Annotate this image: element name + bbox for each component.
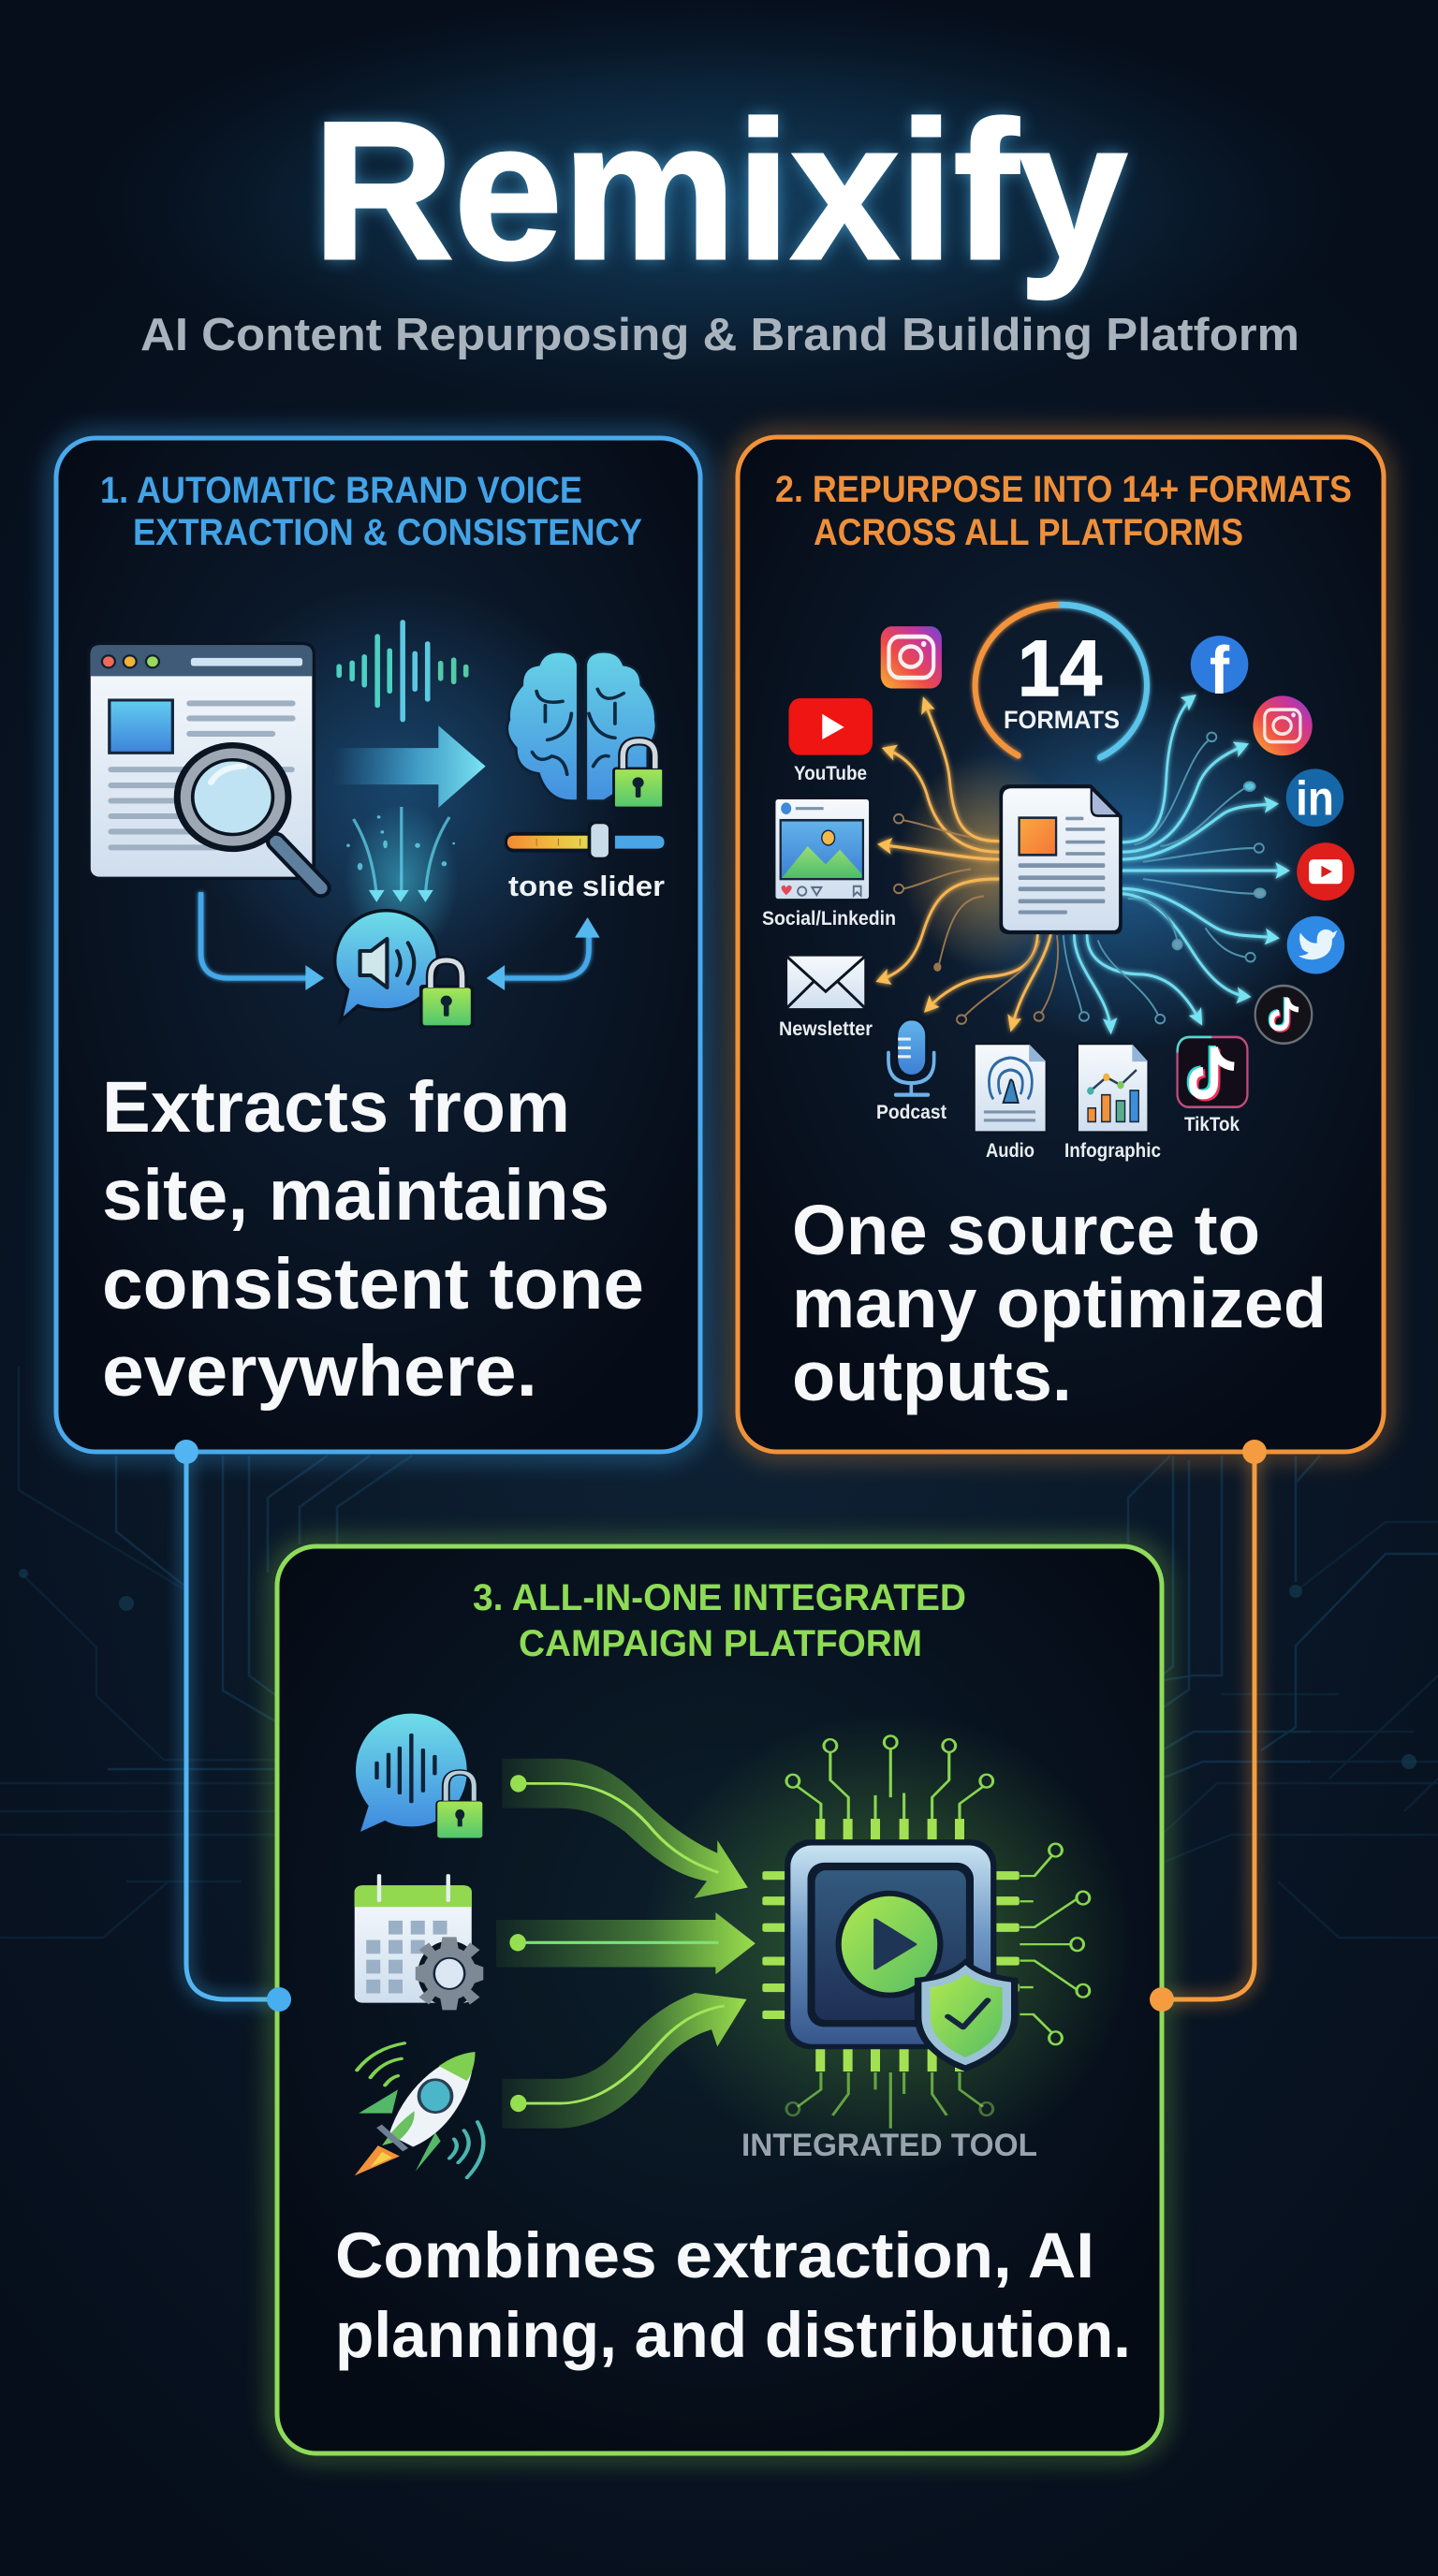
- panel 1 body text: everywhere.: [102, 1331, 537, 1412]
- integrated tool label: INTEGRATED TOOL: [741, 2128, 1037, 2163]
- panel: repurpose formats: [738, 437, 1384, 1452]
- title: Remixify: [313, 80, 1127, 300]
- icon: chip traces: [786, 1735, 1090, 2129]
- icon: facebook: [1191, 634, 1248, 709]
- icon: chip with play button: [785, 1839, 996, 2049]
- icon: falling particles: [345, 803, 458, 957]
- FORMATS label: FORMATS: [1004, 706, 1120, 734]
- panel 3 body text: [335, 2219, 1131, 2371]
- icon: facebook: f: [1210, 634, 1229, 709]
- format rays: orange: [880, 701, 1050, 1027]
- icon: speech bubble with lock: [335, 911, 475, 1028]
- icon: linkedin: [1286, 768, 1343, 827]
- panel 1 heading: [100, 470, 642, 553]
- format rays: faded orange: [894, 814, 1058, 1024]
- arrow band: calendar to chip: [496, 1912, 756, 1974]
- subtitle: AI Content Repurposing & Brand Building Platform: [140, 310, 1299, 360]
- format labels: Audio: [986, 1140, 1034, 1162]
- panel 3 diagram: [355, 1711, 1134, 2178]
- icon: instagram square: [881, 626, 942, 689]
- connector: orange, panel 2 to panel 3: [1162, 1452, 1255, 1999]
- panel 2 heading: 2. REPURPOSE INTO 14+ FORMATS: [775, 469, 1352, 510]
- connector dot: blue bottom: [267, 1987, 291, 2012]
- panel 3 body text: planning, and distribution.: [335, 2299, 1131, 2371]
- icon: rocket: [355, 2043, 483, 2178]
- panel 1 body text: site, maintains: [102, 1155, 609, 1236]
- icon: tiktok circle: [1255, 986, 1312, 1044]
- connector dot: blue top: [174, 1440, 198, 1464]
- format labels: [762, 763, 1240, 1162]
- panel 1 body text: consistent tone: [102, 1244, 644, 1325]
- panel 1 diagram: [87, 583, 667, 1028]
- format rays: blue: [1074, 697, 1285, 1030]
- connector dot: orange bottom: [1150, 1987, 1174, 2012]
- format labels: Podcast: [876, 1102, 946, 1123]
- icon: youtube: [788, 698, 873, 755]
- icon: brain with lock: [507, 651, 664, 808]
- arrow band: voice to chip: [502, 1759, 748, 1898]
- panel 2 heading: ACROSS ALL PLATFORMS: [814, 512, 1243, 553]
- background circuit traces far: [0, 1367, 1438, 1938]
- icon: instagram circle: [1253, 695, 1313, 755]
- format labels: YouTube: [794, 763, 867, 784]
- 14 number: 14: [1018, 624, 1102, 712]
- panel 1 body text: [102, 1067, 644, 1412]
- icon: audio document: [975, 1044, 1047, 1132]
- icon: envelope: [786, 955, 866, 1010]
- icon: tone slider control: [505, 821, 667, 860]
- panel 1 body text: Extracts from: [102, 1067, 570, 1148]
- background circuit traces near panels: [108, 1456, 1438, 1778]
- connector dot: orange top: [1242, 1440, 1267, 1464]
- panel: integrated platform: [277, 1546, 1162, 2453]
- icon: social post card: [774, 798, 870, 900]
- icon: tiktok square: [1178, 1037, 1247, 1107]
- connector: blue, panel 1 to panel 3: [186, 1452, 279, 1999]
- 14 formats ring: [976, 605, 1147, 757]
- icon: source document: [999, 784, 1123, 934]
- panel 2 body text: outputs.: [792, 1337, 1072, 1415]
- panel: brand voice: [56, 438, 700, 1452]
- arrow: to brain: [334, 725, 486, 808]
- panel 2 body text: One source to: [792, 1191, 1260, 1269]
- icon: browser with magnifier: [87, 642, 321, 888]
- background circuit nodes: [19, 1569, 1416, 1769]
- panel 1 heading: EXTRACTION & CONSISTENCY: [133, 512, 642, 553]
- icon: microphone: [888, 1019, 934, 1095]
- arrow band: rocket to chip: [502, 1993, 747, 2129]
- panel 2 hub diagram: [774, 605, 1355, 1132]
- icon: sound wave: [339, 622, 466, 720]
- panel 3 heading: CAMPAIGN PLATFORM: [519, 1623, 922, 1664]
- title: Remixify: [313, 80, 1127, 300]
- format labels: Infographic: [1064, 1140, 1161, 1162]
- icon: youtube circle: [1297, 842, 1355, 900]
- icon: shield check: [915, 1958, 1019, 2071]
- panel 1 heading: 1. AUTOMATIC BRAND VOICE: [100, 470, 582, 511]
- arrow: slider to bubble: [487, 917, 600, 990]
- arrow: browser to bubble: [201, 892, 324, 990]
- panel 3 heading: 3. ALL-IN-ONE INTEGRATED: [473, 1577, 966, 1618]
- title glow backdrop: [82, 0, 1356, 407]
- panel 2 body text: many optimized: [792, 1264, 1327, 1342]
- format labels: TikTok: [1184, 1114, 1240, 1135]
- format labels: Newsletter: [779, 1018, 873, 1040]
- tone slider label: tone slider: [508, 870, 665, 902]
- icon: calendar with gear: [355, 1876, 483, 2010]
- panel 2 body text: [792, 1191, 1327, 1415]
- format rays: faded blue: [1064, 733, 1266, 1023]
- icon: voice bubble with lock: [356, 1714, 483, 1838]
- icon: twitter: [1287, 916, 1344, 973]
- icon: linkedin: in: [1296, 771, 1334, 826]
- panel 3 body text: Combines extraction, AI: [335, 2219, 1094, 2291]
- panel 3 heading: [473, 1577, 966, 1664]
- format labels: Social/Linkedin: [762, 908, 896, 929]
- panel 2 heading: [775, 469, 1352, 553]
- icon: chip pins: [762, 1819, 1020, 2071]
- icon: infographic document: [1078, 1044, 1148, 1132]
